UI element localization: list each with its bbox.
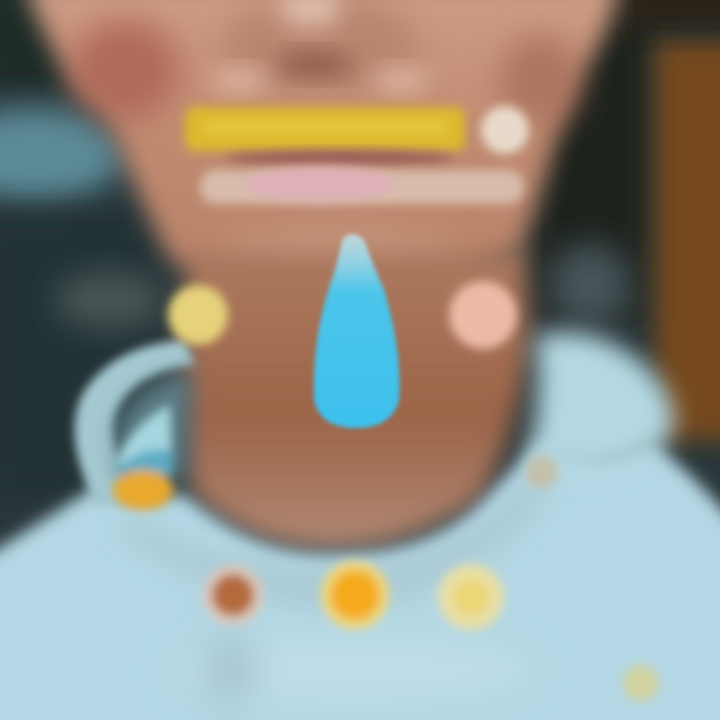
blue drop — [314, 234, 399, 428]
faint yellow marker — [623, 665, 659, 701]
collar band — [120, 475, 550, 610]
yellow title bar — [185, 107, 465, 151]
orange marker — [321, 561, 389, 629]
yellow marker — [168, 285, 228, 345]
small pale marker — [526, 456, 558, 488]
left collar inner — [115, 370, 192, 480]
pale yellow marker — [438, 564, 504, 630]
lips and pale text bar — [200, 150, 524, 204]
white dot — [481, 106, 529, 154]
left collar — [75, 340, 195, 510]
right collar — [525, 332, 674, 472]
face — [25, 0, 620, 295]
brown marker — [203, 565, 263, 625]
peach marker — [449, 281, 517, 349]
neck — [182, 250, 530, 550]
hoodie — [0, 332, 720, 720]
small icon: blue and orange — [112, 405, 173, 510]
